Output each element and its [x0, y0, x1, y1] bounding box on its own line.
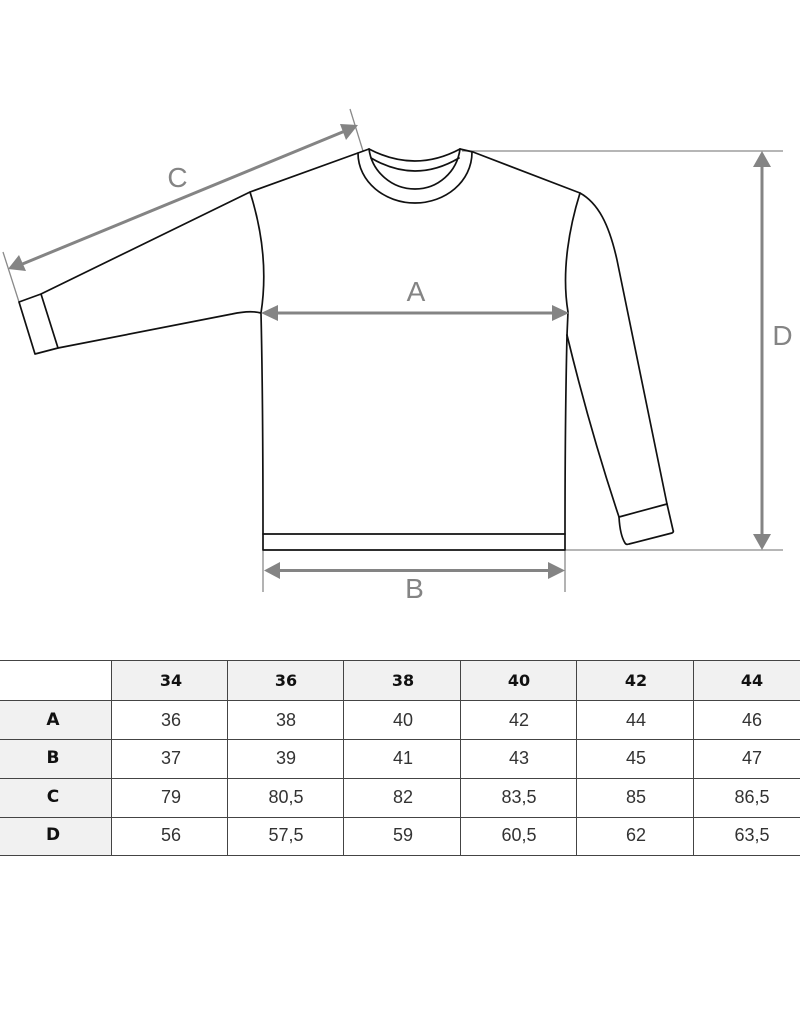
measurement letters: B — [405, 573, 424, 604]
table header row — [160, 671, 763, 690]
table values: 39 — [276, 748, 296, 768]
hem seam — [263, 533, 565, 535]
table row labels: D — [46, 825, 60, 845]
left cuff seam — [41, 294, 58, 348]
table values: 63,5 — [734, 825, 770, 845]
table values: 80,5 — [268, 787, 304, 807]
table header row: 40 — [508, 671, 530, 690]
measurement letters: A — [407, 276, 426, 307]
table values: 59 — [393, 825, 413, 845]
table values: 37 — [161, 748, 181, 768]
table values — [161, 710, 770, 845]
sweatshirt outline — [19, 149, 673, 550]
table values: 36 — [161, 710, 181, 730]
table row labels — [46, 710, 60, 845]
table values: 47 — [742, 748, 762, 768]
table values: 46 — [742, 710, 762, 730]
table values: 86,5 — [734, 787, 770, 807]
table header row: 42 — [625, 671, 647, 690]
table header row: 44 — [741, 671, 763, 690]
table row labels: C — [47, 787, 59, 807]
measurement letters — [167, 162, 793, 604]
table values: 42 — [509, 710, 529, 730]
right cuff seam — [619, 504, 667, 517]
right shoulder and sleeve outer edge — [460, 149, 673, 544]
collar outer edge — [358, 152, 472, 203]
arrow B — [264, 562, 565, 579]
right armhole seam — [566, 193, 580, 335]
table values: 85 — [626, 787, 646, 807]
table header shading — [0, 661, 800, 855]
table values: 82 — [393, 787, 413, 807]
measurement letters: C — [167, 162, 188, 193]
table values: 83,5 — [501, 787, 537, 807]
measurement guide lines — [3, 109, 783, 592]
table values: 57,5 — [268, 825, 304, 845]
table values: 40 — [393, 710, 413, 730]
left sleeve, shoulder and left body side — [19, 149, 567, 550]
table grid — [0, 660, 800, 856]
table values: 44 — [626, 710, 646, 730]
arrow A — [261, 305, 569, 321]
table header row: 36 — [275, 671, 297, 690]
table values: 62 — [626, 825, 646, 845]
table values: 79 — [161, 787, 181, 807]
collar inner back curve — [371, 158, 459, 171]
table values: 56 — [161, 825, 181, 845]
table header row: 38 — [392, 671, 414, 690]
table values: 45 — [626, 748, 646, 768]
table values: 41 — [393, 748, 413, 768]
table values: 60,5 — [501, 825, 537, 845]
table values: 38 — [276, 710, 296, 730]
arrow D — [753, 151, 771, 550]
arrow C — [8, 124, 358, 271]
collar top edge — [369, 149, 460, 161]
left armhole seam — [250, 192, 264, 313]
collar inner front curve — [369, 149, 460, 189]
table header row: 34 — [160, 671, 182, 690]
table row labels: A — [46, 710, 60, 730]
table values: 43 — [509, 748, 529, 768]
measurement letters: D — [772, 320, 793, 351]
table row labels: B — [47, 748, 59, 768]
